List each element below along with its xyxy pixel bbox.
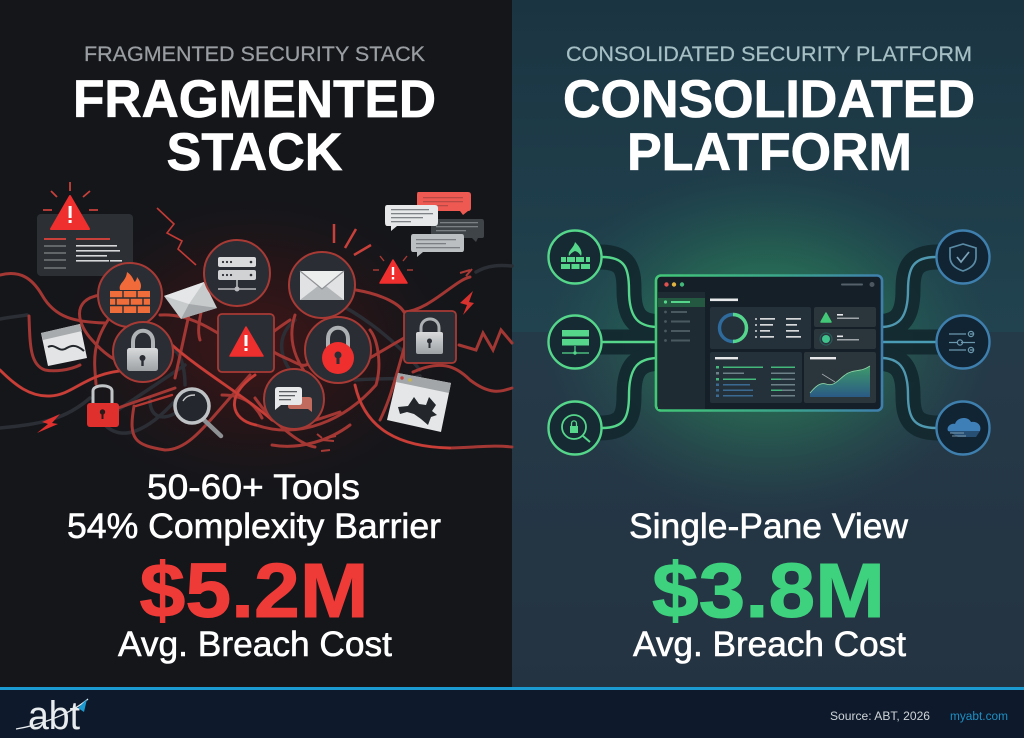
icon: alert card — [37, 182, 133, 276]
big number: $3.8M — [652, 548, 885, 634]
window controls — [664, 282, 874, 287]
icon: red padlock — [87, 386, 119, 427]
card: donut — [710, 307, 811, 349]
bright red wires — [0, 345, 450, 448]
icon: green firewall — [548, 230, 602, 284]
stats: consolidated — [629, 507, 909, 664]
caption: Avg. Breach Cost — [633, 625, 906, 664]
icon: alert rays — [334, 224, 371, 255]
icon: green server — [548, 316, 602, 368]
big number: $5.2M — [140, 548, 368, 634]
icon: paper envelope — [164, 282, 217, 319]
red tangled wires — [0, 274, 512, 450]
source: Source: ABT, 2026 — [830, 711, 930, 723]
website: myabt.com — [950, 711, 1008, 723]
icon: server circle — [204, 240, 270, 306]
card: list — [710, 352, 802, 403]
icon: chat bubbles — [385, 192, 484, 257]
icon: broken wire sparks — [317, 269, 472, 451]
heading: fragmented stack — [73, 70, 436, 182]
panel: right background — [512, 0, 1024, 687]
icon: bolt right — [460, 291, 474, 315]
icon: small alert triangle — [373, 256, 413, 283]
heading: fragmented stack: STACK — [166, 123, 342, 182]
card: area chart — [804, 352, 876, 403]
card: alert status — [814, 307, 876, 327]
icon: blue sliders — [936, 316, 990, 368]
icon: squiggle window — [41, 324, 87, 366]
dashboard window — [656, 276, 882, 410]
icon: grey lock circle — [113, 322, 173, 382]
heading: consolidated platform: CONSOLIDATED — [563, 70, 975, 129]
panel: left background — [0, 0, 512, 687]
stat lines — [67, 468, 441, 546]
stat line: Single-Pane View — [629, 507, 909, 546]
heading: consolidated platform — [563, 70, 975, 182]
icon: wrench window — [387, 373, 451, 432]
stats: fragmented — [67, 468, 441, 664]
subtitle: consolidated: CONSOLIDATED SECURITY PLATFORM — [566, 42, 972, 66]
connector shadows — [600, 257, 938, 428]
icon: firewall circle — [98, 263, 162, 327]
heading: fragmented stack: FRAGMENTED — [73, 70, 436, 129]
icon: lightning top — [157, 208, 196, 265]
caption: Avg. Breach Cost — [118, 625, 392, 664]
diagram: consolidated platform — [548, 230, 990, 454]
subtitle: fragmented: FRAGMENTED SECURITY STACK — [84, 42, 426, 66]
logo: abt — [28, 694, 80, 738]
dark tangled wires — [0, 266, 512, 433]
heading: consolidated platform: PLATFORM — [627, 123, 912, 182]
icon: red lock circle — [305, 317, 371, 383]
green connectors — [602, 257, 656, 428]
sidebar — [658, 292, 705, 409]
card: circle status — [814, 329, 876, 349]
footer — [0, 687, 1024, 738]
icon: green search lock — [548, 402, 602, 454]
icon: blue shield — [936, 230, 990, 284]
icon: lock square — [404, 311, 456, 363]
icon: mail circle — [289, 252, 355, 318]
icon: magnifier — [175, 389, 221, 436]
icon: bolt left — [37, 414, 60, 433]
blue connectors — [883, 257, 936, 428]
illustration: tangled tools — [0, 182, 512, 451]
stat lines: 50-60+ Tools — [147, 468, 360, 507]
icon: blue cloud — [936, 402, 990, 454]
stat lines: 54% Complexity Barrier — [67, 507, 441, 546]
icon: chat circle — [264, 369, 324, 429]
icon: alert square — [218, 314, 274, 372]
